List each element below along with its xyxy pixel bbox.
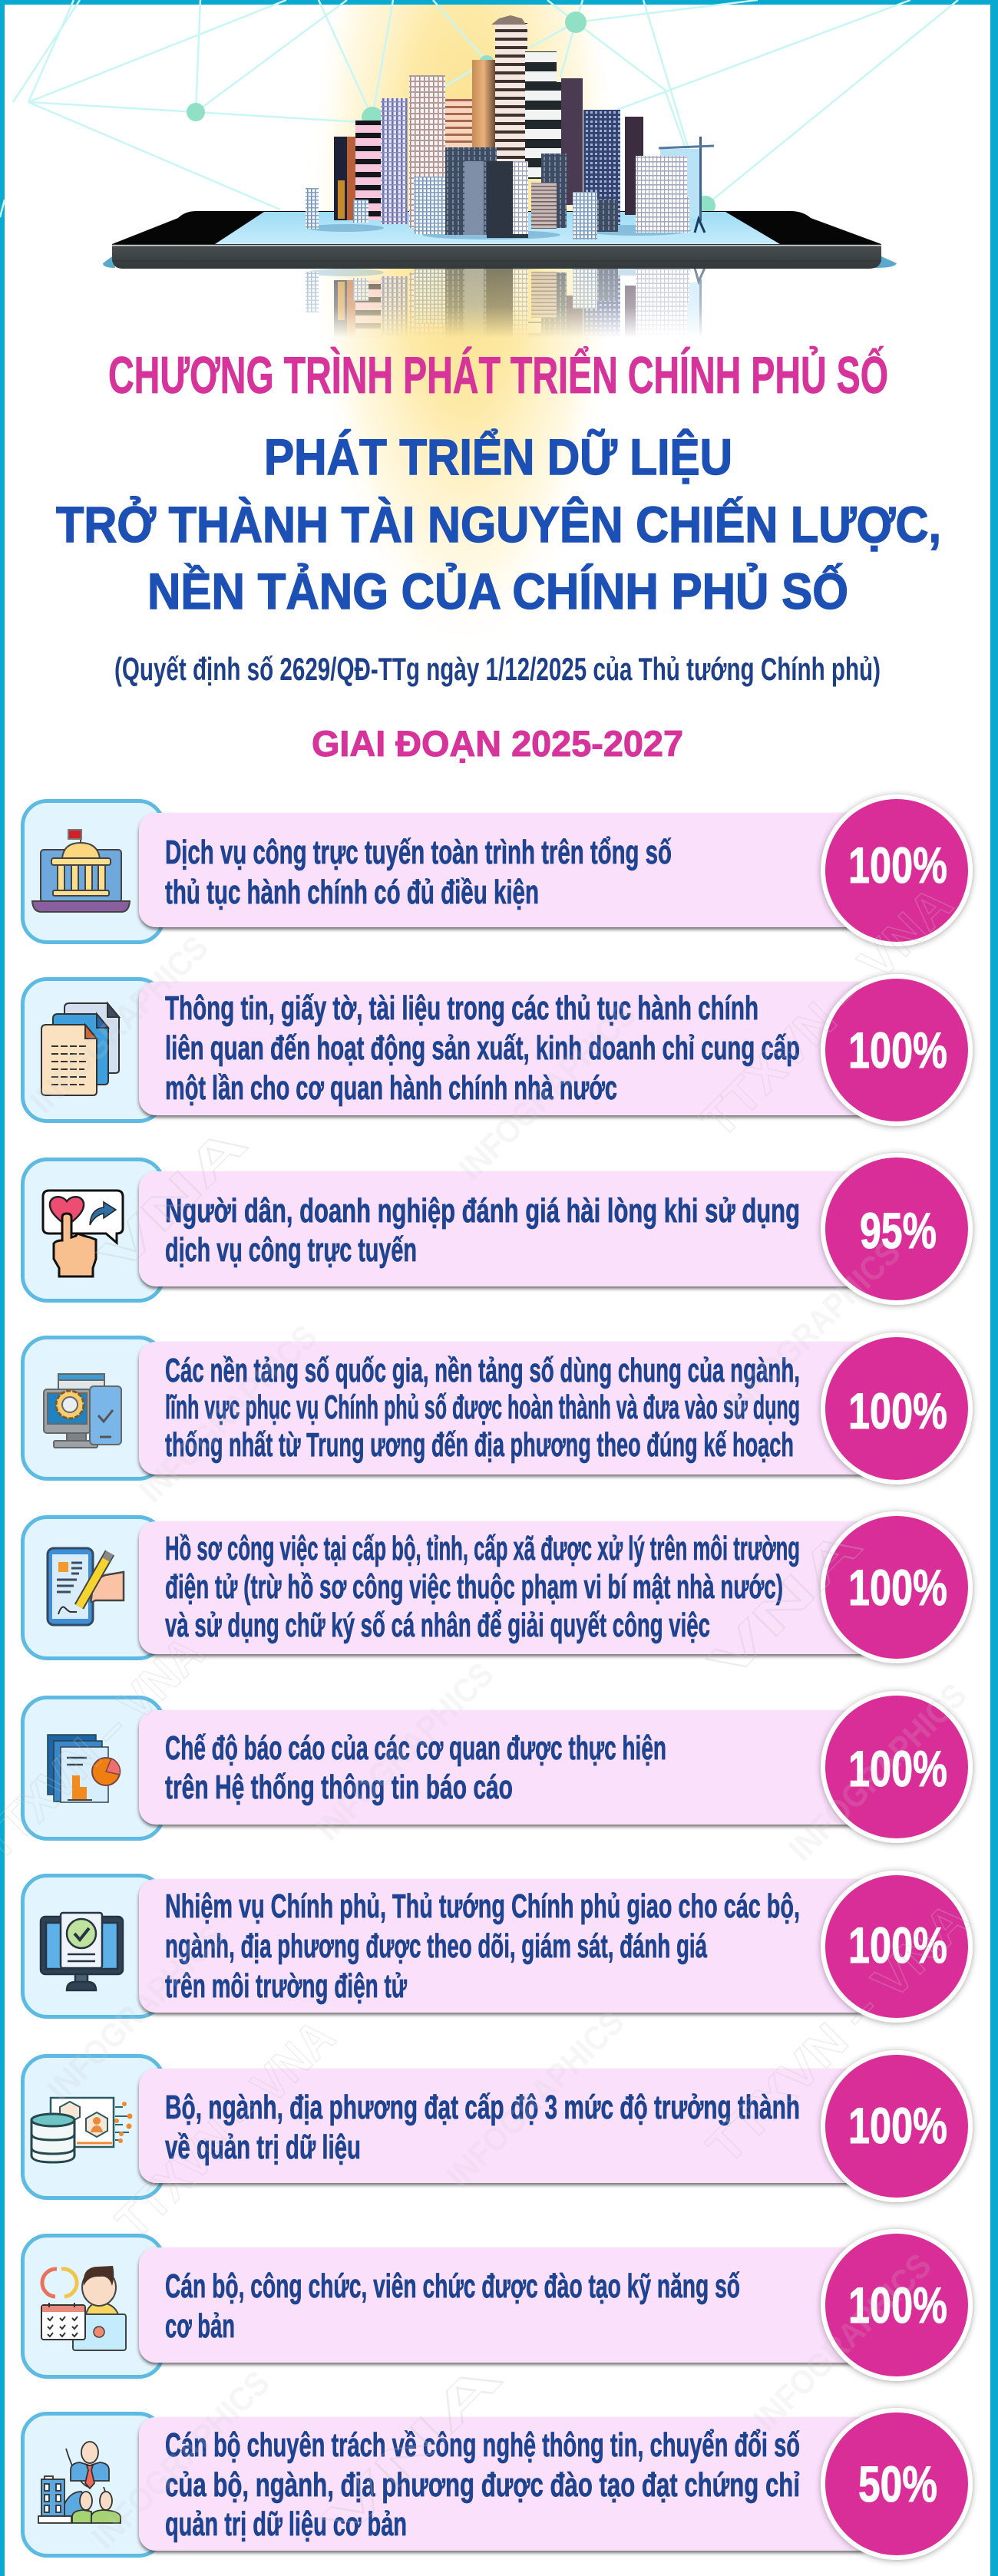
description: về quản trị dữ liệu bbox=[165, 2129, 361, 2166]
main title: PHÁT TRIỂN DỮ LIỆU bbox=[264, 428, 732, 485]
text panel bbox=[139, 1521, 876, 1654]
icon tile bbox=[23, 1337, 163, 1478]
watermarks: INFOGRAPHICS bbox=[40, 1917, 233, 2109]
main title bbox=[56, 428, 941, 619]
icon tile bbox=[23, 2056, 163, 2198]
city skyline bbox=[306, 15, 714, 239]
icon tile bbox=[23, 1517, 163, 1658]
description: một lần cho cơ quan hành chính nhà nước bbox=[165, 1069, 617, 1107]
value badge bbox=[821, 1691, 973, 1843]
watermarks: INFOGRAPHICS bbox=[23, 929, 216, 1121]
main title: NỀN TẢNG CỦA CHÍNH PHỦ SỐ bbox=[147, 563, 848, 619]
watermarks bbox=[0, 876, 980, 2556]
icon: organization staff bbox=[38, 2442, 121, 2523]
icon: database and data profiles bbox=[31, 2098, 132, 2162]
description bbox=[165, 989, 800, 1107]
description: Chế độ báo cáo của các cơ quan được thực hiện bbox=[165, 1729, 666, 1767]
watermarks: INFOGRAPHICS bbox=[746, 2247, 939, 2439]
watermarks: INFOGRAPHICS bbox=[439, 2003, 632, 2195]
item 3 bbox=[23, 1153, 973, 1305]
value badge: 100% bbox=[848, 837, 947, 893]
watermarks: VNA bbox=[698, 1516, 873, 1691]
item 6 bbox=[23, 1691, 973, 1843]
icon tile bbox=[23, 801, 163, 943]
icon tile bbox=[23, 2413, 163, 2556]
icon: government building on laptop bbox=[32, 830, 130, 912]
description: thủ tục hành chính có đủ điều kiện bbox=[165, 874, 539, 911]
value badge: 100% bbox=[848, 1382, 947, 1439]
text panel bbox=[139, 2069, 876, 2183]
description bbox=[165, 1887, 800, 2005]
text panel bbox=[139, 1342, 876, 1475]
description bbox=[165, 2426, 800, 2543]
icon tile bbox=[23, 979, 163, 1121]
text panel bbox=[139, 813, 876, 927]
watermarks: VNA bbox=[88, 1115, 258, 1284]
network nodes bbox=[187, 12, 715, 216]
text panel bbox=[139, 2417, 876, 2551]
text panel bbox=[139, 2247, 876, 2363]
watermarks: INFOGRAPHICS bbox=[84, 2364, 277, 2556]
icon: stacked documents bbox=[41, 1003, 119, 1095]
description bbox=[165, 1729, 666, 1806]
item 7 bbox=[23, 1871, 973, 2023]
description bbox=[165, 2089, 800, 2166]
text panel bbox=[139, 1710, 876, 1825]
value badge bbox=[821, 1333, 973, 1485]
value badge bbox=[821, 2050, 973, 2202]
text panel bbox=[139, 982, 876, 1115]
period heading: GIAI ĐOẠN 2025-2027 bbox=[312, 723, 683, 764]
description: dịch vụ công trực tuyến bbox=[165, 1231, 417, 1269]
yellow light glow bbox=[307, 0, 622, 660]
watermarks: TTXVN – VNA bbox=[105, 2009, 345, 2249]
icon: digital signature on tablet bbox=[48, 1548, 124, 1625]
icon: hand touching heart with share arrow bbox=[43, 1191, 123, 1276]
icon tile bbox=[23, 1159, 163, 1300]
description: Dịch vụ công trực tuyến toàn trình trên tổng số bbox=[165, 834, 672, 871]
value badge bbox=[821, 974, 973, 1126]
value badge: 100% bbox=[848, 2277, 947, 2333]
text panel bbox=[139, 1879, 876, 2013]
icon tile bbox=[23, 1698, 163, 1839]
smartphone bbox=[103, 211, 897, 269]
item 2 bbox=[23, 974, 973, 1126]
value badge bbox=[821, 1153, 973, 1305]
value badge bbox=[821, 1871, 973, 2023]
icon tile bbox=[23, 1876, 163, 2017]
watermarks: INFOGRAPHICS bbox=[309, 1656, 501, 1848]
description: trên môi trường điện tử bbox=[165, 1967, 407, 2005]
description bbox=[165, 1530, 800, 1644]
value badge: 100% bbox=[848, 1022, 947, 1078]
item 8 bbox=[23, 2050, 973, 2202]
icon: report with charts bbox=[48, 1735, 121, 1802]
item 9 bbox=[23, 2229, 973, 2381]
watermarks: INFOGRAPHICS bbox=[132, 1318, 325, 1510]
description: cơ bản bbox=[165, 2307, 235, 2345]
value badge: 95% bbox=[860, 1202, 937, 1259]
watermarks: TTXVN – VNA bbox=[690, 876, 963, 1148]
value badge bbox=[821, 1511, 973, 1663]
item 4 bbox=[23, 1333, 973, 1485]
icon: devices with gear bbox=[44, 1374, 121, 1448]
value badge bbox=[821, 2408, 973, 2560]
item 10 bbox=[23, 2408, 973, 2560]
item 1 bbox=[23, 794, 973, 946]
description: quản trị dữ liệu cơ bản bbox=[165, 2505, 407, 2543]
value badge bbox=[821, 794, 973, 946]
watermarks: INFOGRAPHICS bbox=[451, 996, 644, 1187]
description bbox=[165, 1352, 800, 1464]
value badge: 100% bbox=[848, 1559, 947, 1616]
icon: person with calendar and laptop bbox=[41, 2266, 126, 2350]
city reflection bbox=[306, 269, 706, 335]
value badge: 100% bbox=[848, 1740, 947, 1797]
watermarks: TTXVN – VNA bbox=[696, 1891, 980, 2175]
description: trên Hệ thống thông tin báo cáo bbox=[165, 1769, 513, 1806]
value badge: 100% bbox=[848, 2097, 947, 2154]
watermarks: VNA bbox=[311, 2349, 513, 2551]
value badge: 100% bbox=[848, 1917, 947, 1973]
watermarks: INFOGRAPHICS bbox=[715, 1234, 908, 1425]
watermarks: INFOGRAPHICS bbox=[782, 1676, 974, 1868]
description bbox=[165, 1192, 800, 1269]
text panel bbox=[139, 1171, 876, 1286]
icon: monitor with approved document bbox=[41, 1913, 123, 1990]
value badge: 50% bbox=[858, 2455, 937, 2512]
item 5 bbox=[23, 1511, 973, 1663]
description bbox=[165, 834, 672, 911]
network line pattern bbox=[0, 0, 958, 217]
value badge bbox=[821, 2229, 973, 2381]
icon tile bbox=[23, 2235, 163, 2376]
description bbox=[165, 2267, 740, 2345]
